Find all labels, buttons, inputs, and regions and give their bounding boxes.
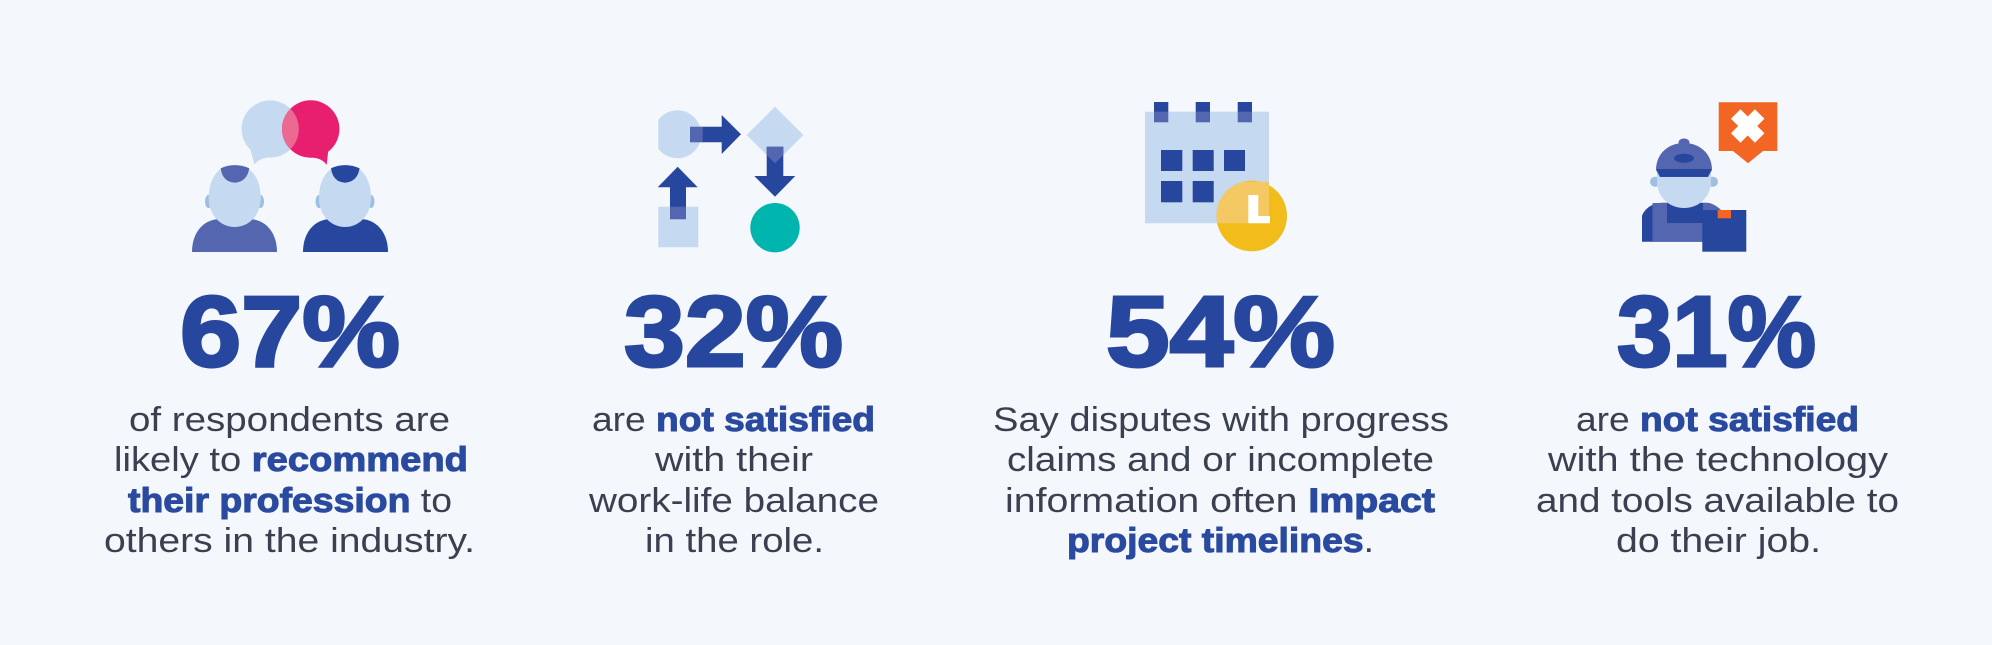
text: work-life balance: with their: [654, 441, 813, 479]
text: technology and tools: and tools available to: [1536, 482, 1899, 520]
statistic: 54%: 54%: [1106, 276, 1335, 388]
text: technology and tools: [1536, 401, 1899, 560]
panel: work-life balance: [588, 107, 879, 560]
panel: progress claims: [993, 102, 1449, 560]
text: work-life balance: [588, 401, 879, 560]
panel: recommend profession: [104, 100, 475, 560]
panel: technology and tools: [1536, 102, 1899, 560]
text: technology and tools: do their job.: [1616, 522, 1821, 560]
icon: worker with parcel and rejection badge: [1642, 102, 1777, 252]
text: recommend profession: others in the industry.: [104, 522, 475, 560]
text: recommend profession: likely to recommend: [114, 441, 468, 479]
text: recommend profession: their profession to: [128, 482, 452, 520]
text: work-life balance: are not satisfied: [592, 401, 875, 439]
text: work-life balance: work-life balance: [588, 482, 879, 520]
text: technology and tools: are not satisfied: [1576, 401, 1859, 439]
text: recommend profession: [104, 401, 475, 560]
text: progress claims: Say disputes with progress: [993, 401, 1449, 439]
text: work-life balance: in the role.: [645, 522, 824, 560]
text: progress claims: claims and or incomplete: [1007, 441, 1434, 479]
text: progress claims: [993, 401, 1449, 560]
text: technology and tools: with the technology: [1547, 441, 1888, 479]
statistic: 32%: 32%: [624, 276, 843, 388]
icon: two people talking: [192, 100, 388, 252]
text: progress claims: project timelines .: [1067, 522, 1374, 560]
statistic: 31%: 31%: [1617, 276, 1816, 388]
icon: calendar with clock: [1145, 102, 1287, 251]
icon: flow chart: [658, 107, 803, 252]
text: recommend profession: of respondents are: [129, 401, 450, 439]
statistic: 67%: 67%: [180, 276, 400, 388]
text: progress claims: information often Impact: [1005, 482, 1435, 520]
